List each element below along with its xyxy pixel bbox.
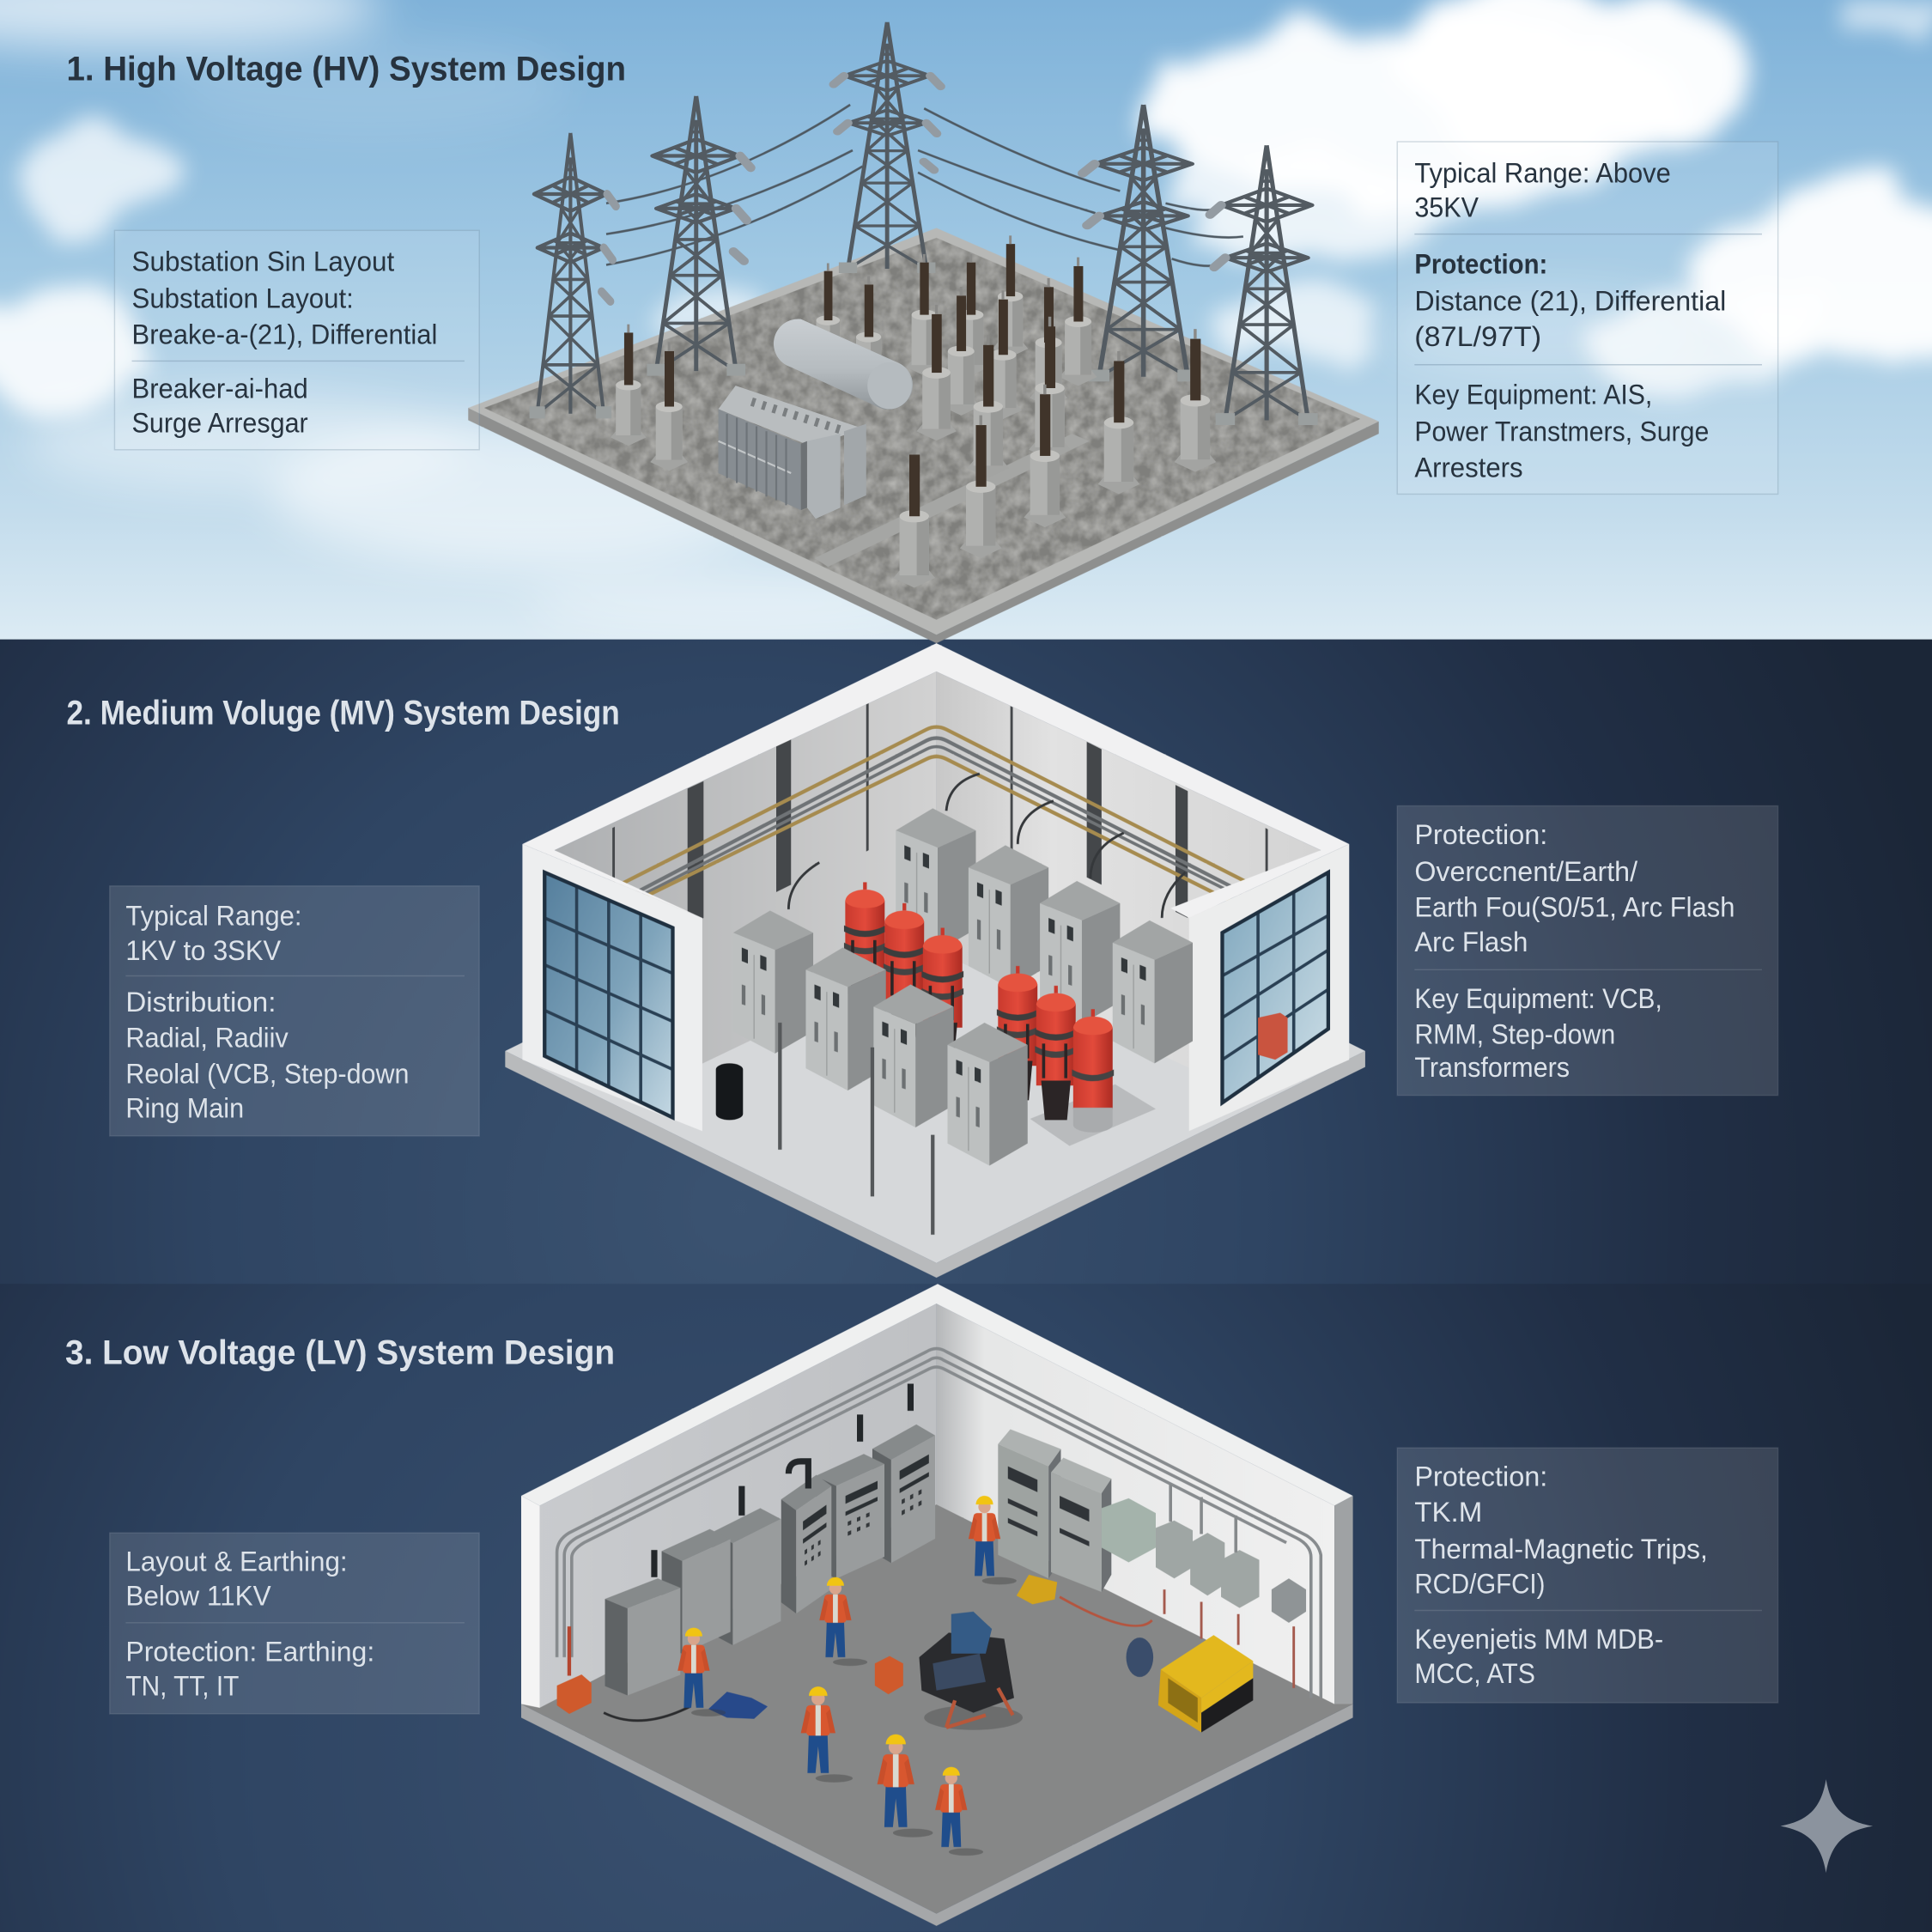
panel: LV right notes: Keyenjetis MM MDB- [1414, 1624, 1663, 1655]
tower 2 [647, 96, 750, 376]
tower 3 [834, 22, 941, 273]
radiators [807, 434, 841, 519]
panel: MV right notes: Arc Flash [1414, 927, 1528, 957]
panel: HV right notes [1397, 142, 1778, 494]
panel: HV right notes: Power Transtmers, Surge [1414, 416, 1709, 447]
panel: HV right notes: Distance (21), Differential [1414, 286, 1726, 317]
panel: MV right notes: Transformers [1414, 1052, 1570, 1083]
panel: LV left notes [110, 1533, 479, 1714]
panel: LV right notes: Thermal-Magnetic Trips, [1414, 1534, 1708, 1564]
panel: HV right notes: Arresters [1414, 452, 1523, 483]
central machinery pile [919, 1612, 1023, 1730]
panel: MV left notes: Ring Main [125, 1092, 244, 1123]
conservator tank [774, 319, 913, 410]
panel: LV right notes: TK.M [1414, 1497, 1482, 1528]
front cabinets [873, 985, 1028, 1165]
panel: HV right notes: Key Equipment: AIS, [1414, 380, 1652, 410]
panel: HV right notes: Typical Range: Above [1414, 157, 1671, 188]
title: high voltage: 1. High Voltage (HV) System Design [66, 49, 626, 88]
tower 1 [530, 133, 616, 418]
panel: LV right notes [1397, 1448, 1778, 1703]
workers [677, 1496, 1017, 1856]
panel: HV right notes: Protection: [1414, 249, 1547, 280]
panel: MV left notes: 1KV to 3SKV [125, 935, 282, 966]
panel: MV right notes: Overccnent/Earth/ [1414, 856, 1637, 887]
transmission towers [530, 22, 1318, 425]
panel: HV left notes: Breaker-ai-had [132, 373, 308, 404]
icon: four-point sparkle [1781, 1779, 1873, 1873]
puffy clouds [0, 0, 1932, 425]
back row cabinets [896, 808, 1193, 1063]
panel: HV left notes: Surge Arresgar [132, 408, 308, 439]
overhead conductors [606, 105, 1243, 266]
panel: HV left notes [114, 230, 479, 450]
panel: MV right notes: Protection: [1414, 819, 1547, 850]
panel: LV right notes: RCD/GFCI) [1414, 1568, 1545, 1599]
panel: MV left notes [110, 886, 479, 1136]
yellow portable tool [1017, 1575, 1057, 1604]
panel: MV right notes: Key Equipment: VCB, [1414, 983, 1662, 1014]
panel: HV left notes: Substation Layout: [132, 283, 354, 314]
insulator columns, front row [893, 351, 1139, 587]
orange drum [875, 1656, 903, 1694]
red tanks back group [844, 882, 963, 1062]
wall top rim [522, 643, 1349, 918]
panel: MV right notes [1397, 805, 1778, 1096]
yellow generator [1127, 1635, 1253, 1733]
insulator columns, back rows [611, 235, 1216, 478]
tank base pad [1030, 1084, 1156, 1146]
soft hazy clouds [0, 0, 1700, 635]
right window wall [1189, 844, 1349, 1131]
blue tool on floor [708, 1692, 768, 1719]
left wall switchboards [605, 1425, 935, 1695]
platform slab [468, 228, 1379, 643]
left window wall [522, 844, 702, 1131]
power transformer with conservator tank [719, 319, 913, 519]
conduits on walls [623, 727, 1247, 902]
back wall left [555, 671, 937, 1070]
front cabinets left group [733, 910, 886, 1091]
right wall switchboards [998, 1430, 1111, 1592]
panel: MV left notes: Radial, Radiiv [125, 1023, 289, 1054]
left wall face [540, 1303, 937, 1708]
panel: MV right notes: Earth Fou(S0/51, Arc Flash [1414, 892, 1735, 923]
title: low voltage: 3. Low Voltage (LV) System Design [65, 1333, 615, 1371]
vent stacks [654, 1383, 910, 1577]
cooling fins [719, 409, 801, 510]
panel: MV right notes: RMM, Step-down [1414, 1018, 1615, 1049]
panel: MV left notes: Typical Range: [125, 901, 302, 932]
right wall face [937, 1303, 1334, 1704]
panel: MV left notes: Reolal (VCB, Step-down [125, 1058, 409, 1089]
panel: LV left notes: Protection: Earthing: [125, 1636, 374, 1667]
panel: LV left notes: Below 11KV [125, 1581, 271, 1612]
gravel access road [815, 434, 1089, 567]
floor slab [521, 1501, 1353, 1926]
grounding poles [780, 1023, 933, 1235]
red drum seen through window [1258, 1013, 1288, 1060]
orange junction box left [557, 1674, 592, 1714]
panel: LV left notes: TN, TT, IT [125, 1670, 239, 1701]
panel: HV left notes: Substation Sin Layout [132, 246, 394, 277]
wall columns [612, 701, 1268, 926]
title: medium voltage: 2. Medium Voluge (MV) System Design [66, 694, 620, 732]
section: high voltage sky background [0, 0, 1932, 640]
illustration: MV switchgear room [505, 643, 1365, 1278]
floor slab [505, 838, 1365, 1278]
black drum [716, 1063, 743, 1120]
section: medium voltage background [0, 640, 1932, 1284]
illustration: LV room with workers [521, 1284, 1353, 1926]
red tanks front group [997, 966, 1114, 1133]
section: low voltage background [0, 1284, 1932, 1932]
wall mounted panels [1102, 1485, 1306, 1623]
illustration: HV substation [468, 22, 1379, 643]
tower 5 [1210, 145, 1318, 425]
red and dark cables [569, 1589, 1294, 1721]
tower 4 [1083, 105, 1198, 381]
panel: LV left notes: Layout & Earthing: [125, 1546, 348, 1577]
conduits on walls [557, 1349, 1321, 1698]
panel: HV right notes: (87L/97T) [1414, 321, 1541, 352]
panel: HV left notes: Breake-a-(21), Differential [132, 319, 437, 349]
back wall right [937, 671, 1321, 1070]
panel: LV right notes: MCC, ATS [1414, 1658, 1535, 1689]
panel: HV right notes: 35KV [1414, 192, 1479, 223]
transformer top [719, 386, 864, 446]
panel: LV right notes: Protection: [1414, 1461, 1547, 1492]
wall tops and end caps [521, 1284, 1353, 1708]
cable loops [788, 774, 1185, 918]
panel: MV left notes: Distribution: [125, 987, 276, 1018]
